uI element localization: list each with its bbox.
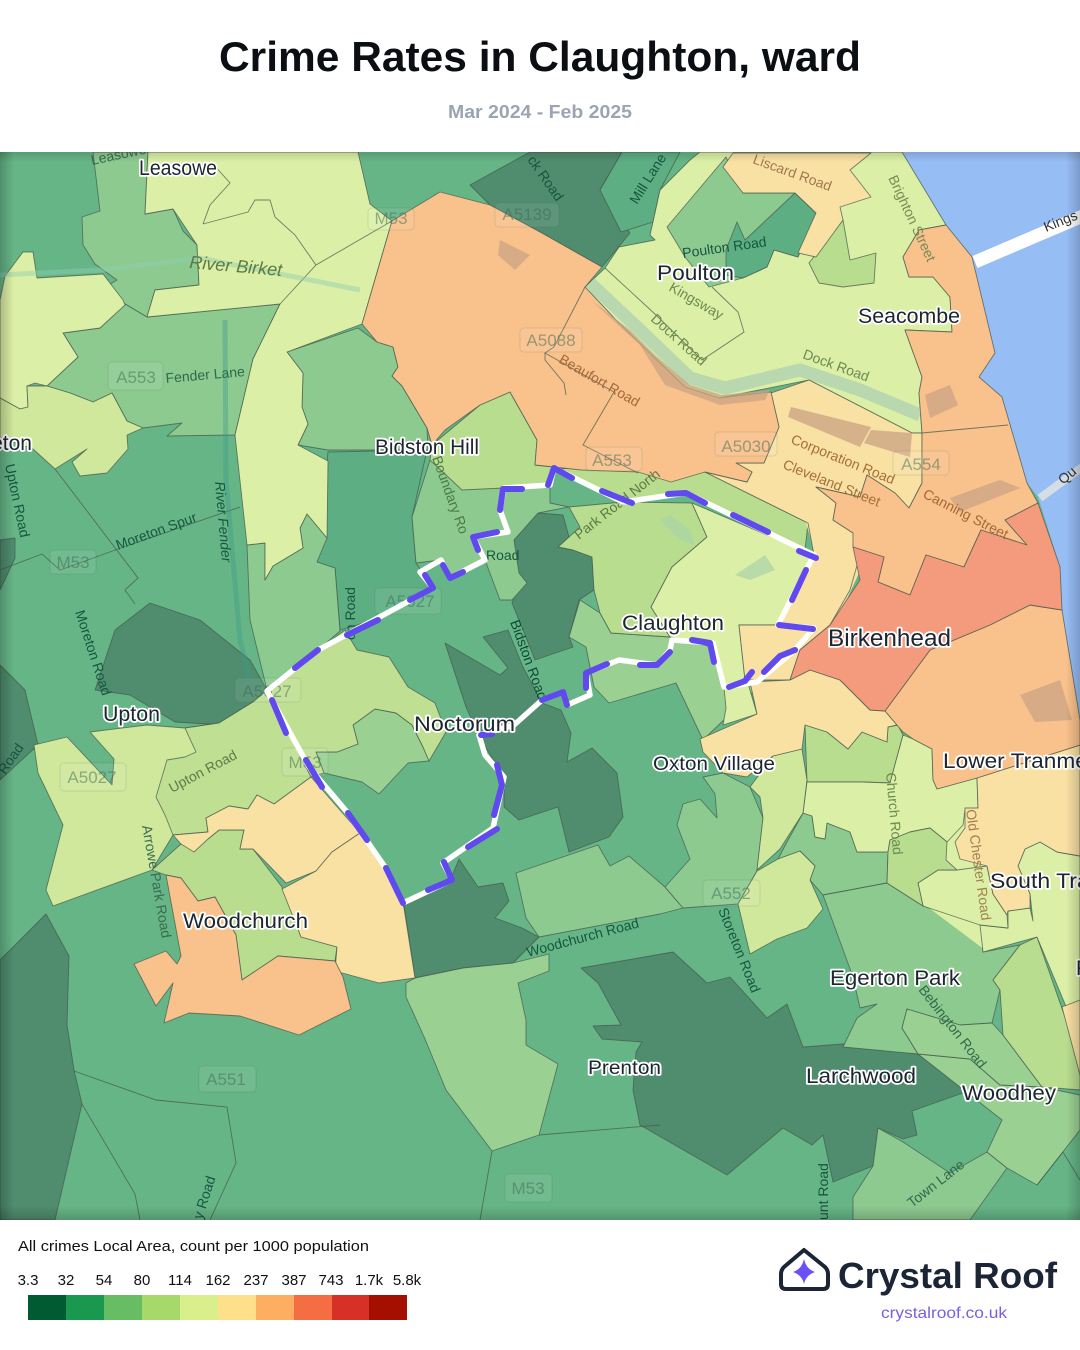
road labels: Upton Road bbox=[2, 462, 33, 539]
areas: lime patches in Seacombe and Tranmere bbox=[809, 220, 957, 906]
areas: light green bbox=[47, 152, 1020, 1220]
road labels: Upton Road bbox=[166, 746, 239, 796]
road shields: A554 bbox=[901, 455, 941, 474]
road labels: Town Lane bbox=[904, 1156, 967, 1210]
map edge vignette bbox=[0, 152, 1080, 1220]
road shields: M53 bbox=[511, 1179, 545, 1198]
place label: Woodhey: Woodhey bbox=[962, 1082, 1057, 1105]
road shields: A552 bbox=[711, 884, 751, 903]
road labels: Kings bbox=[1041, 207, 1080, 235]
road labels: Leasowe Road bbox=[89, 133, 184, 168]
areas: dark green, lowest rates bbox=[0, 152, 1000, 1220]
legend title: All crimes Local Area, count per 1000 population bbox=[18, 1238, 369, 1255]
road labels: River Fender bbox=[212, 481, 235, 564]
legend scale labels bbox=[18, 1272, 422, 1289]
road shields: A553 bbox=[116, 368, 156, 387]
road labels: Brighton Street bbox=[885, 173, 939, 264]
areas: cream bbox=[173, 153, 1080, 1075]
areas: orange bbox=[134, 192, 1080, 1035]
legend scale labels: 3.3 bbox=[18, 1272, 38, 1289]
road labels: Road bbox=[486, 547, 519, 563]
road labels: Old Chester Road bbox=[963, 808, 994, 921]
road labels: on Road bbox=[342, 587, 358, 640]
road labels: Bidston Road bbox=[507, 618, 551, 702]
ward interior lines bbox=[0, 165, 1080, 1220]
title: Crime Rates in Claughton, ward bbox=[219, 33, 861, 80]
place label: Egerton Park: Egerton Park bbox=[830, 967, 961, 990]
road shields: A5030 bbox=[721, 437, 771, 456]
road labels: Cleveland Street bbox=[781, 456, 883, 510]
road labels: Arrowe Park Road bbox=[139, 824, 175, 939]
legend scale labels: 114 bbox=[168, 1272, 192, 1289]
road shields: A553 bbox=[592, 451, 632, 470]
place label: Birkenhead: Birkenhead bbox=[828, 625, 951, 652]
road shields: M53 bbox=[374, 209, 408, 228]
road labels: Church Road bbox=[883, 772, 906, 855]
road labels: y Road bbox=[190, 1174, 219, 1221]
road labels: Mill Lane bbox=[626, 150, 669, 207]
legend scale labels: 1.7k bbox=[355, 1272, 384, 1289]
areas: deep green patch in Poulton bbox=[726, 193, 816, 278]
legend scale labels: 80 bbox=[134, 1272, 150, 1289]
road labels: Bebington Road bbox=[916, 982, 990, 1071]
road labels: Corporation Road bbox=[789, 431, 897, 487]
legend colour ramp bbox=[28, 1295, 407, 1320]
legend scale labels: 743 bbox=[318, 1272, 344, 1289]
road labels: Moreton Road bbox=[72, 608, 115, 697]
brand name: Crystal Roof bbox=[838, 1255, 1058, 1296]
road labels: Beaufort Road bbox=[556, 351, 643, 410]
areas: pale yellow-green bbox=[0, 152, 1080, 1040]
place label: Leasowe: Leasowe bbox=[139, 157, 217, 180]
areas: mid-deep green bbox=[317, 152, 680, 630]
road shields: A5027 bbox=[242, 682, 292, 701]
road labels: Storeton Road bbox=[715, 905, 764, 995]
road labels: Moreton Spur bbox=[114, 509, 199, 553]
legend scale labels: 32 bbox=[58, 1272, 74, 1289]
road labels: Kingsway bbox=[666, 279, 726, 323]
river fender bbox=[225, 320, 250, 680]
icon: house with sparkle bbox=[781, 1250, 828, 1289]
water: River Mersey bbox=[902, 152, 1080, 720]
legend scale labels: 54 bbox=[96, 1272, 112, 1289]
place label: Bidston Hill: Bidston Hill bbox=[375, 436, 479, 459]
ferry routes bbox=[975, 215, 1080, 498]
legend bbox=[18, 1238, 422, 1320]
docks: water band bbox=[590, 283, 920, 415]
subtitle: date range: Mar 2024 - Feb 2025 bbox=[448, 102, 632, 122]
road shields: M53 bbox=[288, 753, 322, 772]
park ponds bbox=[660, 515, 775, 580]
road labels: unt Road bbox=[815, 1163, 831, 1220]
brand url: crystalroof.co.uk bbox=[881, 1305, 1008, 1322]
legend scale labels: 5.8k bbox=[393, 1272, 422, 1289]
road labels: Boundary Ro bbox=[429, 454, 472, 536]
areas: salmon, highest rates bbox=[790, 503, 1062, 711]
ward boundary: Claughton bbox=[267, 468, 816, 903]
areas: lime-green west of ward bbox=[156, 630, 446, 835]
place label: Upton: Upton bbox=[103, 703, 160, 726]
road shields: A5027 bbox=[67, 768, 117, 787]
place label: Woodchurch: Woodchurch bbox=[183, 910, 308, 933]
road labels: Liscard Road bbox=[751, 151, 834, 194]
areas: NE cluster around Poulton Road bbox=[667, 157, 816, 287]
place label: Noctorum: Noctorum bbox=[414, 713, 515, 736]
areas: lime bbox=[152, 392, 1080, 1090]
road labels: ck Road bbox=[525, 153, 567, 204]
areas: yellow-green (west) bbox=[0, 386, 823, 954]
road labels: Canning Street bbox=[921, 485, 1011, 542]
road labels: Qu bbox=[1055, 463, 1079, 487]
road shields bbox=[50, 203, 949, 1202]
road labels: Fender Lane bbox=[165, 363, 246, 386]
logo: Crystal Roof bbox=[781, 1250, 1058, 1322]
road labels: River Birket bbox=[189, 252, 284, 280]
place label: Larchwood: Larchwood bbox=[806, 1065, 916, 1088]
place label: Seacombe: Seacombe bbox=[858, 305, 960, 328]
place label: Claughton: Claughton bbox=[622, 612, 724, 635]
legend scale labels: 387 bbox=[281, 1272, 307, 1289]
place label: Poulton: Poulton bbox=[657, 262, 734, 285]
legend scale labels: 162 bbox=[205, 1272, 231, 1289]
legend scale labels: 237 bbox=[243, 1272, 269, 1289]
river birket bbox=[0, 258, 360, 290]
dock sheds: grey-brown patches bbox=[498, 240, 1072, 722]
road labels: Woodchurch Road bbox=[525, 914, 641, 960]
road shields: A5027 bbox=[385, 592, 435, 611]
road shields: A5088 bbox=[526, 331, 576, 350]
road labels: Dock Road bbox=[801, 346, 872, 385]
areas: soft green bbox=[316, 600, 1080, 1185]
road labels: Poulton Road bbox=[681, 233, 767, 261]
place label: Oxton Village: Oxton Village bbox=[653, 754, 775, 775]
place label: Prenton: Prenton bbox=[588, 1058, 661, 1079]
road labels: Dock Road bbox=[648, 310, 710, 369]
road shields: M53 bbox=[56, 553, 90, 572]
road shields: A5139 bbox=[502, 205, 552, 224]
road shields: A551 bbox=[206, 1070, 246, 1089]
road labels: Park Road North bbox=[571, 466, 663, 542]
